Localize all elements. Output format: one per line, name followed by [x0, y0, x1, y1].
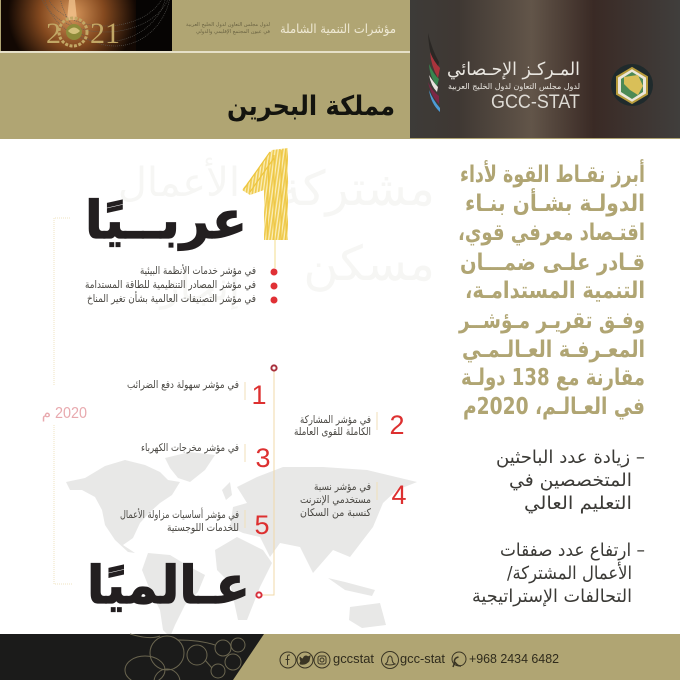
rank 2: في مؤشر المشاركة	[300, 414, 371, 426]
rank 2	[294, 410, 405, 440]
bullet: joint ventures: التحالفات الإستراتيجية	[472, 586, 632, 607]
world map	[66, 452, 417, 637]
icon: GCC emblem	[611, 64, 653, 106]
header small caption	[186, 22, 271, 35]
text block: strengths intro: الدولـة بشـأن بنـاء	[465, 187, 645, 217]
bullet: joint ventures: الأعمال المشتركة/	[507, 562, 632, 584]
bullet: researchers: – زيادة عدد الباحثين	[496, 447, 645, 468]
bullet: joint ventures	[472, 540, 645, 607]
dotted bracket line	[54, 218, 72, 584]
item marker 1	[270, 268, 278, 276]
text block: strengths intro: مقارنة مع 138 دولـة	[461, 365, 645, 391]
text block: strengths intro: التنمية المستدامـة،	[465, 278, 645, 304]
rank 5	[120, 507, 270, 540]
header background	[0, 0, 680, 139]
list: Arab rank indicators	[85, 264, 278, 305]
rank 1: 1	[251, 380, 267, 410]
logo latin name: GCC-STAT	[491, 92, 580, 113]
rank 5: في مؤشر أساسيات مزاولة الأعمال	[120, 507, 239, 521]
rank 4: كنسبة من السكان	[300, 507, 371, 519]
bullet: joint ventures: – ارتفاع عدد صفقات	[500, 540, 645, 561]
year label 2020: م	[42, 404, 51, 422]
timeline bottom marker	[256, 592, 262, 598]
rank ticks	[245, 382, 377, 528]
background calligraphy: الأعمال	[118, 157, 240, 206]
bullet: researchers	[496, 447, 645, 514]
rank 2: 2	[389, 410, 405, 440]
header small caption: في عيون المجتمع الإقليمي والدولي	[196, 29, 271, 35]
rank 2: الكاملة للقوى العاملة	[294, 426, 371, 438]
heading: global rank: عـالميًا	[87, 556, 250, 616]
rank 3	[141, 442, 271, 473]
logo subtitle: لدول مجلس التعاون لدول الخليج العربية	[448, 82, 580, 91]
rank 1: في مؤشر سهولة دفع الضرائب	[127, 379, 239, 391]
item text 1: في مؤشر خدمات الأنظمة البيئية	[140, 264, 256, 277]
timeline	[256, 365, 277, 598]
text block: strengths intro: المعـرفـة العـالـمـي	[462, 337, 645, 363]
connector	[274, 240, 276, 268]
bullet: researchers: التعليم العالي	[524, 493, 632, 514]
rank 3: في مؤشر مخرجات الكهرباء	[141, 442, 239, 454]
panel: GCC-STAT logo	[410, 0, 680, 138]
text block: strengths intro: في العـالـم، 2020م	[463, 394, 645, 420]
rank 5: للخدمات اللوجستية	[167, 522, 239, 534]
item text 3: في مؤشر التصنيفات العالمية بشأن تغير المناخ	[87, 291, 256, 305]
social handle gcc-stat: gcc-stat	[400, 652, 446, 666]
rank 3: 3	[255, 443, 271, 473]
timeline top marker	[271, 365, 277, 371]
rank 4: 4	[391, 480, 407, 510]
social handle gccstat: gccstat	[333, 652, 375, 666]
header small caption: لدول مجلس التعاون لدول الخليج العربية	[186, 22, 270, 28]
phone number: +968 2434 6482	[469, 652, 559, 666]
footer gold band	[233, 634, 680, 680]
footer	[0, 634, 680, 680]
banner: 2021 image	[1, 0, 172, 51]
text block: strengths intro: قـادر علـى ضمـــان	[460, 250, 645, 276]
item marker 2	[270, 282, 278, 290]
heading number 1 scribble	[242, 148, 288, 240]
heading: Arab rank: عربــيًا	[85, 191, 247, 251]
country heading: مملكة البحرين	[227, 91, 395, 122]
header divider	[0, 51, 410, 53]
header indicators title: مؤشرات التنمية الشاملة	[280, 21, 396, 37]
globe	[59, 18, 87, 46]
footer pattern	[125, 634, 245, 680]
rank 4: في مؤشر نسبة	[314, 481, 371, 493]
social icons	[280, 652, 466, 668]
year digits: 21	[90, 17, 120, 50]
year label 2020: 2020	[55, 405, 87, 422]
background calligraphy: مشتركة	[277, 161, 435, 217]
background calligraphy	[118, 157, 435, 310]
icon: flag ribbon	[428, 33, 440, 112]
year 2021: 2	[46, 17, 61, 50]
item marker 3	[270, 296, 278, 304]
background calligraphy: إنجاز	[158, 264, 240, 310]
rank 1	[127, 379, 267, 410]
rank 5: 5	[254, 510, 270, 540]
logo arabic name: المـركـز الإحـصائي	[447, 59, 580, 80]
item text 2: في مؤشر المصادر التنظيمية للطاقة المستدامة	[85, 279, 256, 291]
rank 4	[300, 480, 407, 519]
text block: strengths intro	[458, 158, 645, 420]
bullet: researchers: المتخصصين في	[509, 470, 632, 491]
background calligraphy: مسكن	[303, 236, 435, 292]
year label 2020	[42, 404, 87, 422]
rank 4: مستخدمي الإنترنت	[300, 494, 371, 506]
